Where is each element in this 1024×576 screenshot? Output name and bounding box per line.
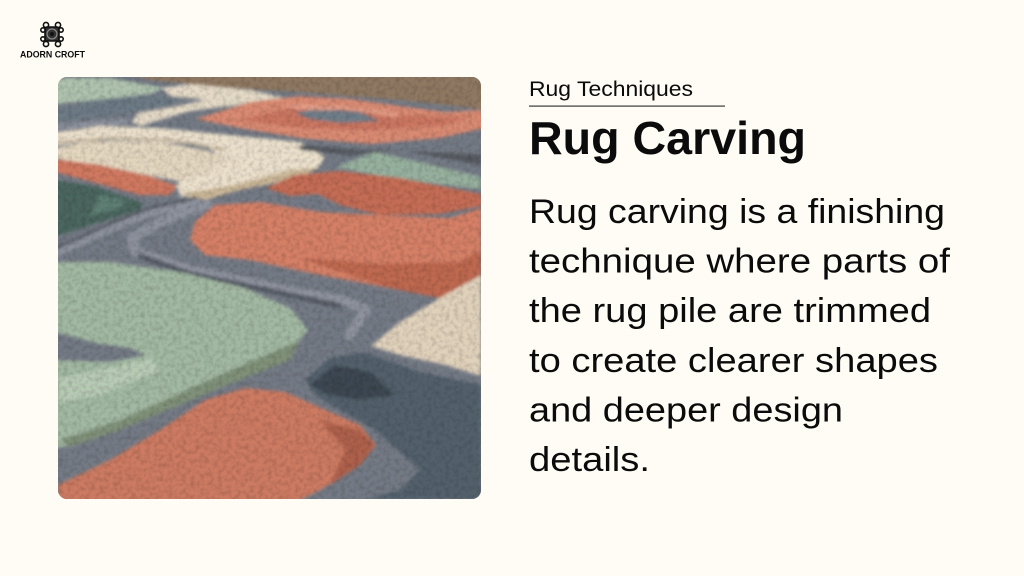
eyebrow underline	[529, 106, 725, 107]
dark groove right	[300, 145, 481, 165]
grey carved lines	[52, 198, 366, 335]
wool texture overlay	[58, 77, 481, 499]
sage strip right	[335, 152, 481, 189]
body text: and deeper design	[529, 392, 843, 430]
title: Rug Carving: Rug Carving	[529, 112, 806, 164]
cream block right	[371, 275, 481, 376]
thin coral block	[55, 159, 177, 195]
coral ring	[196, 96, 485, 144]
eyebrow: Rug Techniques: Rug Techniques	[529, 77, 693, 101]
body text: technique where parts of	[529, 242, 950, 280]
large sage block	[55, 262, 308, 448]
upper coral block	[266, 171, 481, 215]
large coral block	[190, 202, 481, 298]
body text: Rug carving is a finishing	[529, 193, 945, 231]
icon: logo mark	[41, 22, 63, 47]
long cream strip and block	[55, 126, 325, 199]
dark green block	[55, 180, 143, 236]
dark slate block	[305, 352, 481, 499]
body text	[529, 193, 950, 479]
body text: the rug pile are trimmed	[529, 292, 931, 330]
body text: details.	[529, 441, 650, 479]
photo: carved rug close-up	[52, 70, 490, 505]
body text: to create clearer shapes	[529, 342, 938, 380]
logo wordmark: ADORN CROFT	[20, 50, 85, 60]
bottom coral block	[58, 388, 376, 505]
background wall	[138, 77, 481, 110]
blue grey band	[55, 96, 188, 123]
cream top block	[132, 84, 285, 126]
top left sage block	[55, 78, 165, 104]
logo: Adorn Croft	[20, 22, 85, 60]
